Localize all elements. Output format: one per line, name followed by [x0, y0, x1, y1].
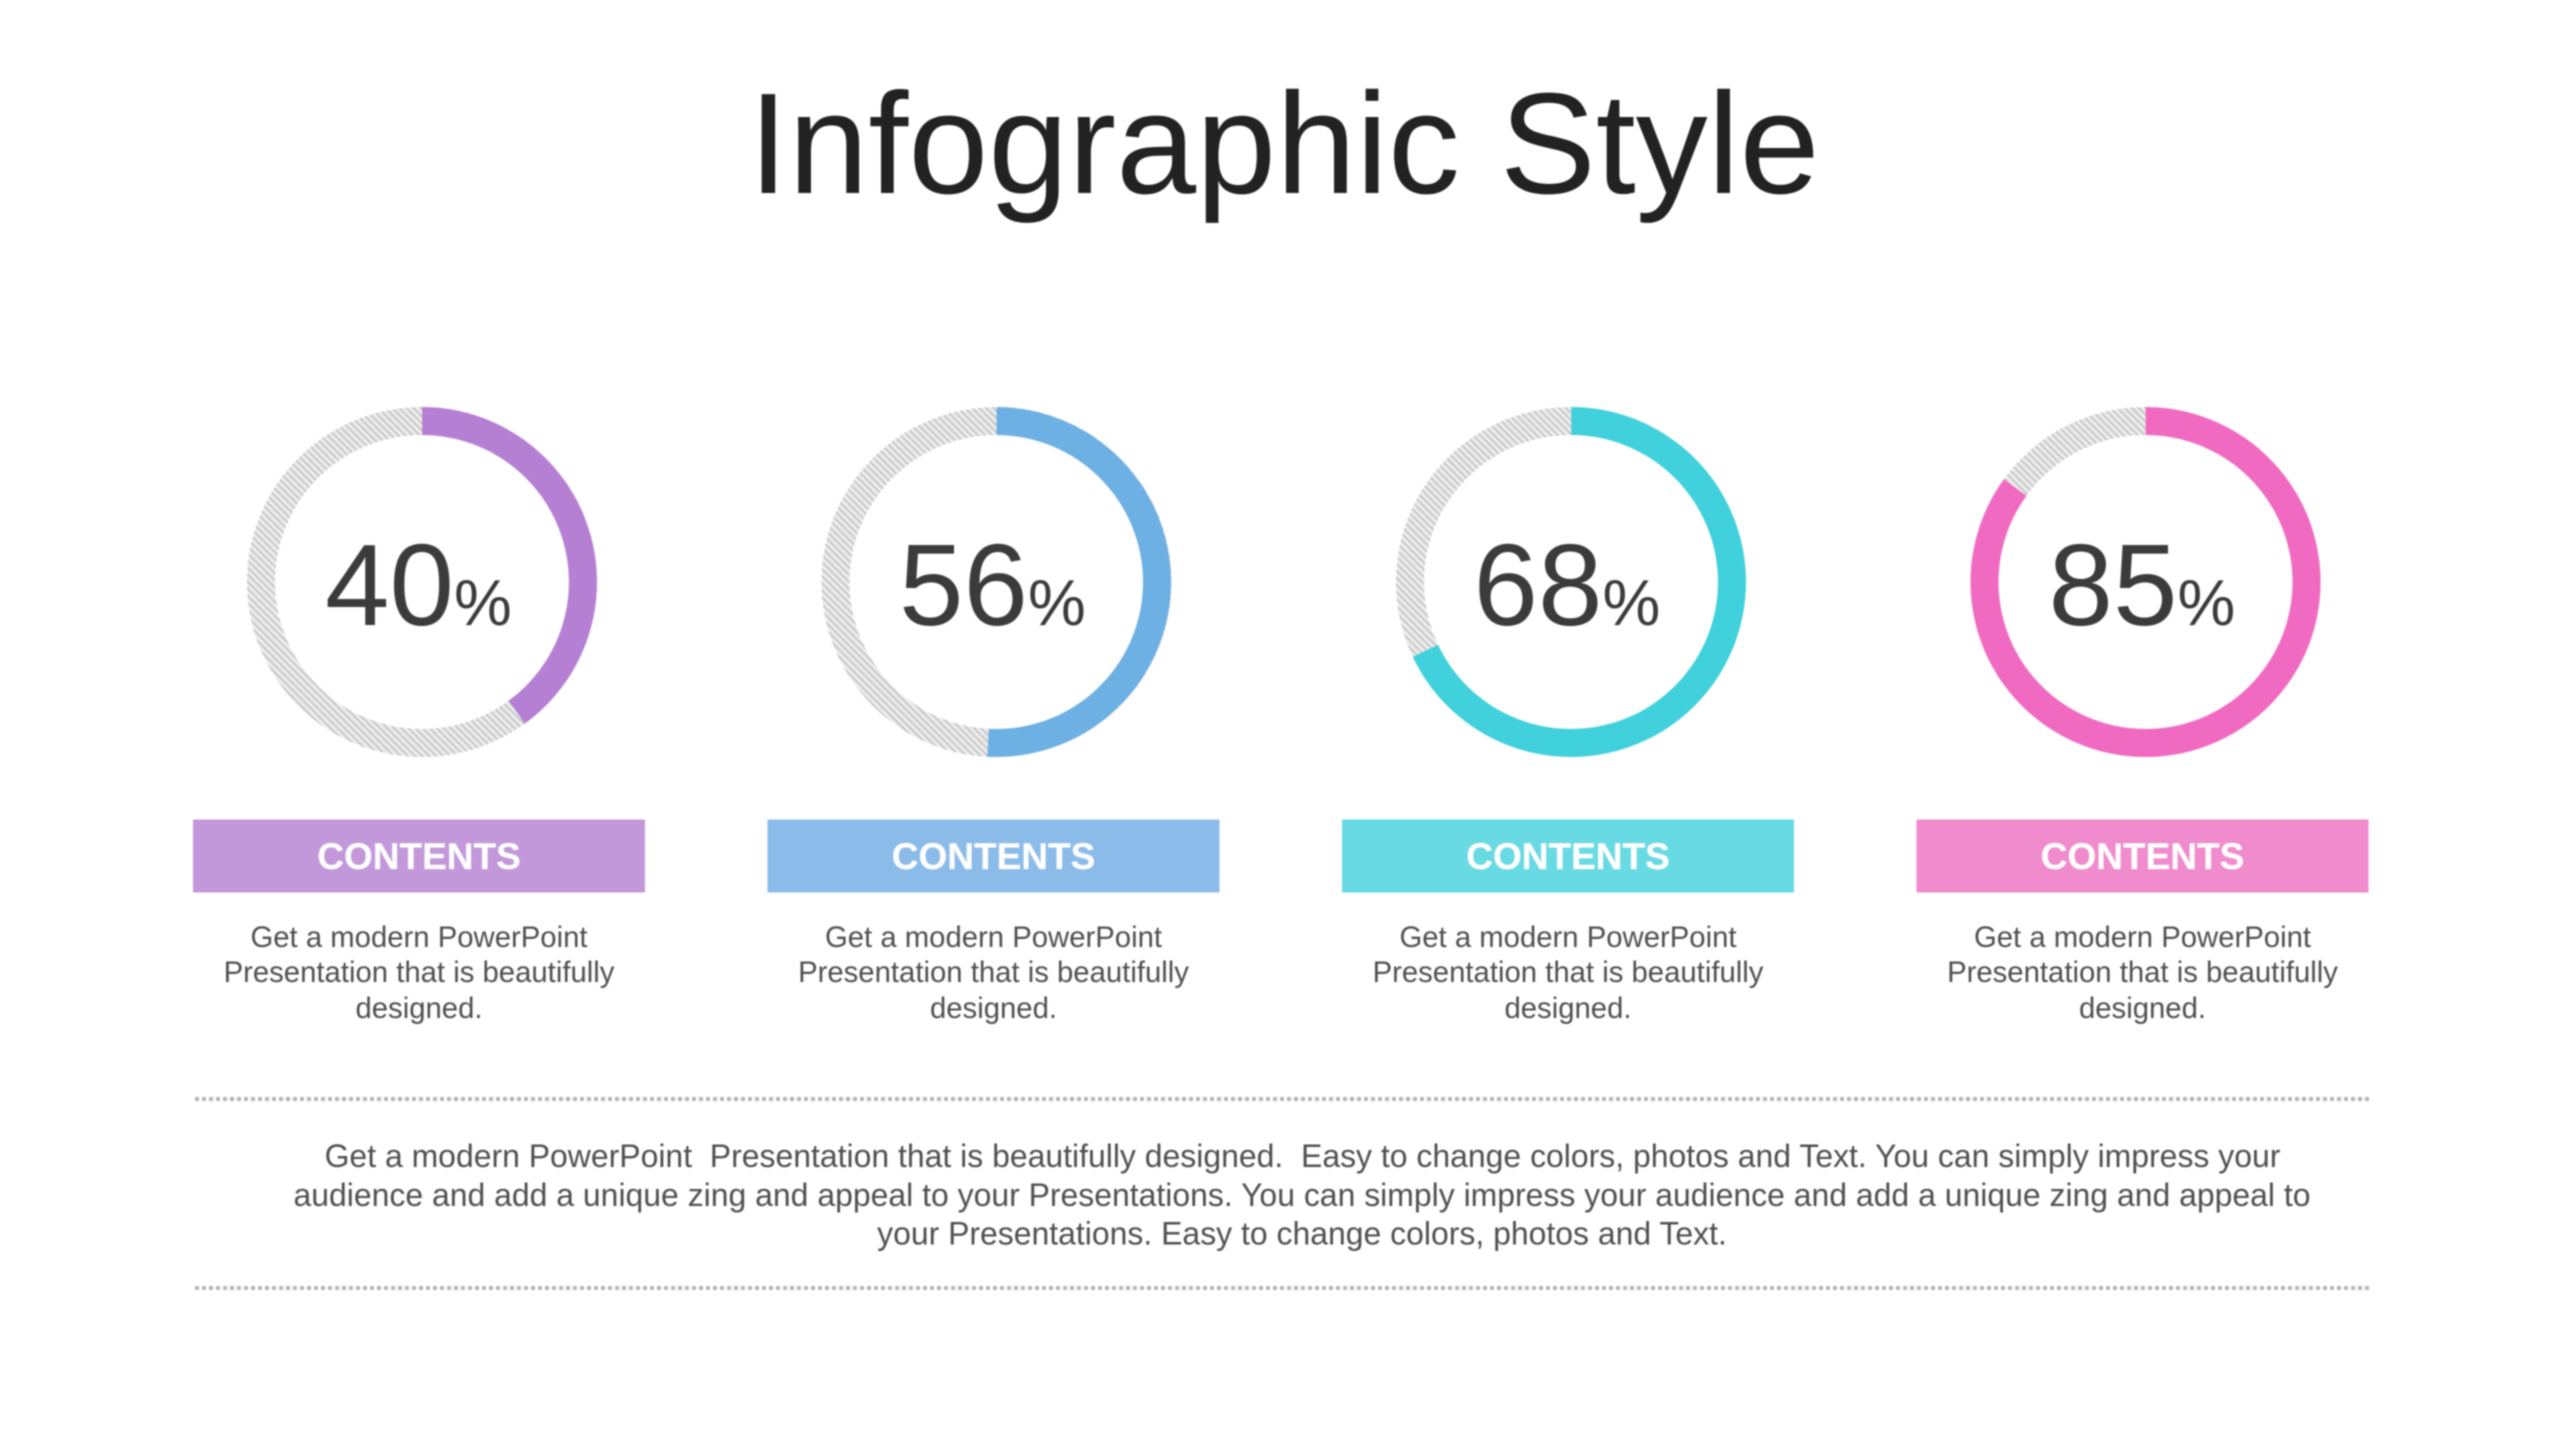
label bar: contents [768, 820, 1220, 892]
description: Presentation that is beautifully [1947, 956, 2338, 989]
description: designed. [930, 992, 1057, 1025]
value: 56%: 56% [899, 520, 1086, 650]
panel: 85% pink [1916, 421, 2368, 1025]
donut chart: 56% [836, 421, 1158, 743]
value: 68%: 68% [1474, 520, 1660, 650]
title: Infographic Style [748, 64, 1820, 224]
description: designed. [2079, 992, 2206, 1025]
donut chart: 68% [1410, 421, 1732, 743]
panel: 40% purple [193, 421, 645, 1025]
label bar: contents: CONTENTS [1466, 836, 1670, 877]
donut chart: 40% [261, 421, 583, 743]
description: designed. [1504, 992, 1632, 1025]
label bar: contents [193, 820, 645, 892]
value: 85%: 85% [2048, 520, 2235, 650]
label bar: contents: CONTENTS [317, 836, 521, 877]
label bar: contents [1916, 820, 2368, 892]
body paragraph: audience and add a unique zing and appeal to your Presentations. You can simply impress your audience and add a unique zing and appeal to [293, 1177, 2311, 1213]
label bar: contents: CONTENTS [892, 836, 1095, 877]
description: Get a modern PowerPoint [1399, 921, 1737, 954]
description: designed. [355, 992, 483, 1025]
panel: 68% cyan [1342, 421, 1794, 1025]
description: Get a modern PowerPoint [250, 921, 588, 954]
body paragraph: Get a modern PowerPoint Presentation that is beautifully designed. Easy to change colors, photos and Text. You can simply impress your [325, 1138, 2281, 1174]
panel: 56% blue [768, 421, 1220, 1025]
body paragraph: your Presentations. Easy to change colors, photos and Text. [877, 1216, 1727, 1252]
label bar: contents [1342, 820, 1794, 892]
description: Get a modern PowerPoint [825, 921, 1162, 954]
value: 40%: 40% [325, 520, 512, 650]
donut chart: 85% [1984, 421, 2307, 743]
description: Presentation that is beautifully [1373, 956, 1764, 989]
description: Presentation that is beautifully [224, 956, 615, 989]
label bar: contents: CONTENTS [2041, 836, 2244, 877]
description: Presentation that is beautifully [798, 956, 1189, 989]
description: Get a modern PowerPoint [1974, 921, 2311, 954]
